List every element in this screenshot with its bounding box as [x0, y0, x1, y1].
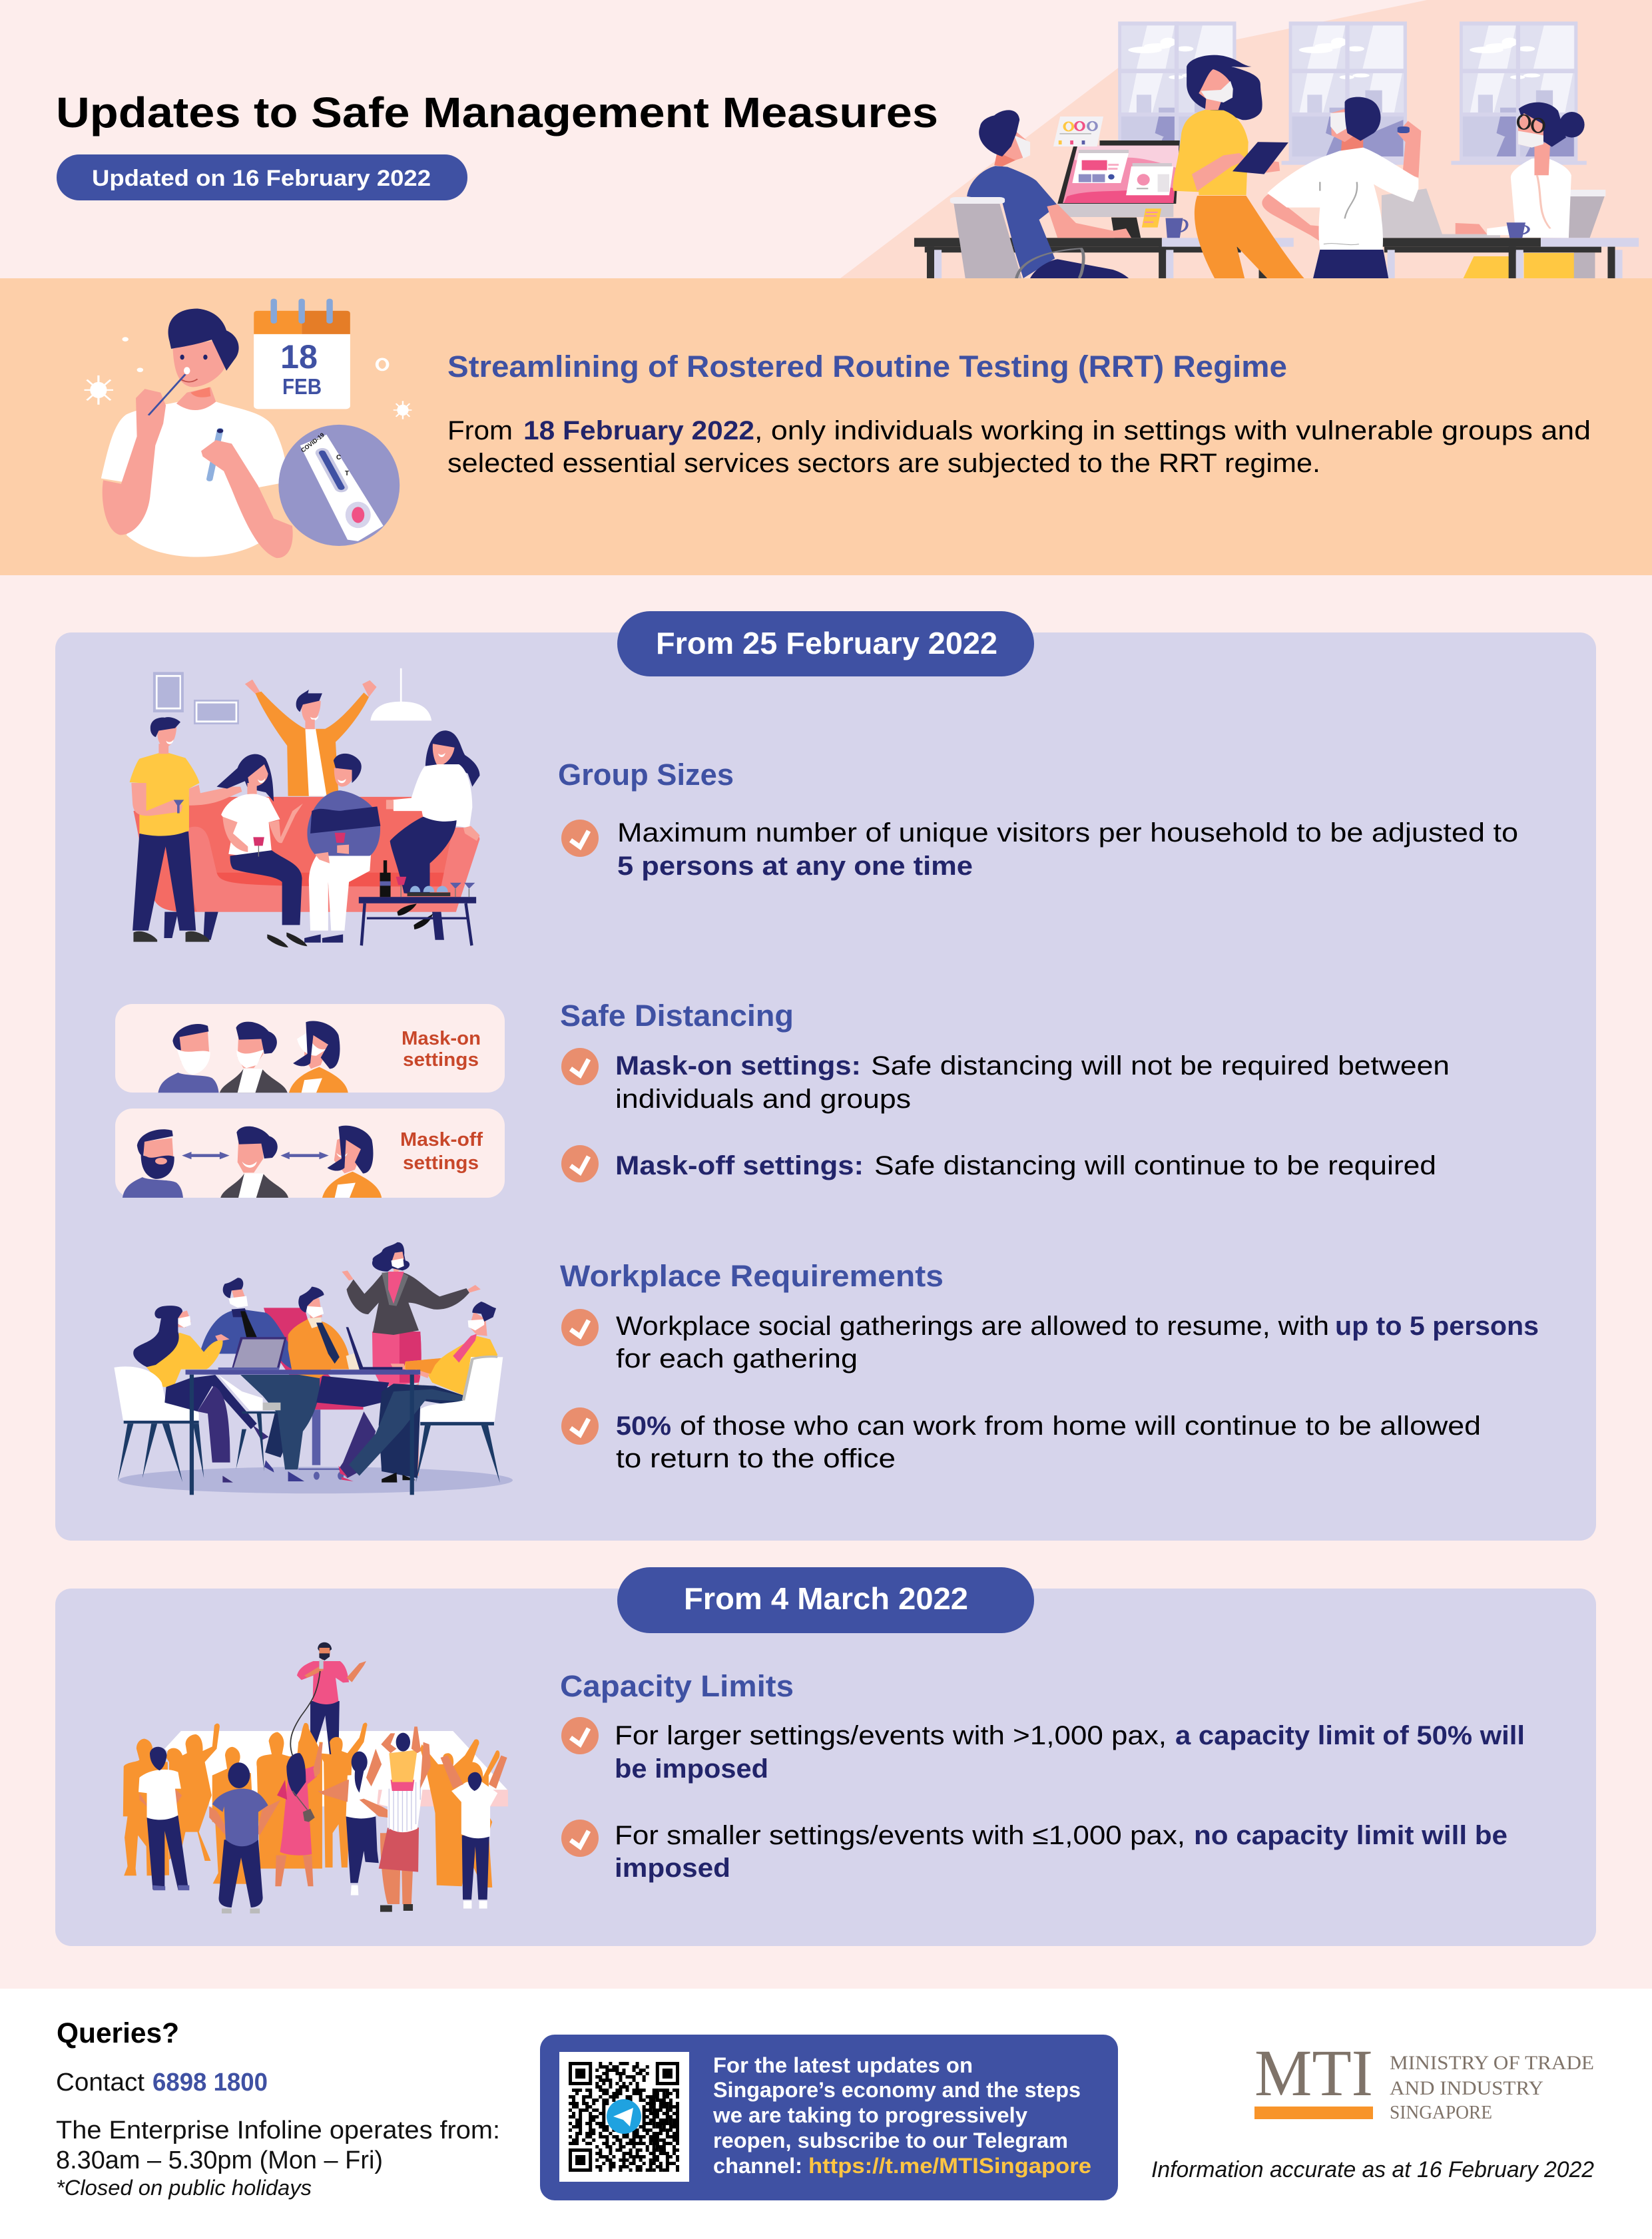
telegram call to action: we are taking to progressively: [712, 2103, 1027, 2127]
monitor: [1053, 117, 1187, 238]
text block: mask-off: Safe distancing will continue to be required: [874, 1151, 1436, 1180]
card: mask-off settings: [115, 1109, 505, 1198]
header section: [56, 0, 1652, 278]
man in white shirt: [1262, 97, 1500, 278]
standing woman: [342, 1242, 481, 1476]
woman in yellow with tablet: [1173, 55, 1304, 278]
text block: group sizes: 5 persons at any one time: [617, 852, 973, 881]
text block: mask-on: individuals and groups: [615, 1085, 911, 1114]
stage: [164, 1731, 508, 1806]
panel: telegram subscription: [540, 2035, 1118, 2200]
woman in yellow: [133, 1306, 223, 1387]
date pill: [617, 1567, 1034, 1633]
man in purple tee: [209, 1762, 280, 1913]
heading: workplace requirements: Workplace Requirements: [560, 1259, 944, 1293]
illustration: man swabbing nose, calendar and test kit: C: [336, 454, 341, 461]
man in orange: [288, 1287, 389, 1481]
icon: tick: [561, 1717, 599, 1754]
heading: capacity limits: Capacity Limits: [560, 1669, 794, 1703]
left chair: [114, 1367, 280, 1483]
text block: workplace gatherings: up to 5 persons: [1335, 1312, 1539, 1341]
logo: MTI: MINISTRY OF TRADE: [1390, 2052, 1594, 2074]
woman in pink dress: [275, 1742, 323, 1886]
heading: RRT: Streamlining of Rostered Routine Testing (RRT) Regime: [447, 350, 1287, 383]
back chair: [264, 1308, 364, 1480]
icon: telegram: [607, 2099, 641, 2134]
logo: MTI: MTI: [1254, 2036, 1373, 2110]
text block: group sizes: Maximum number of unique visitors per household to be adjusted to: [617, 818, 1518, 848]
text block: mask-on: [615, 1051, 1450, 1114]
text block: RRT details: selected essential services sectors are subjected to the RRT regime.: [447, 449, 1320, 478]
finder patterns: [569, 2062, 679, 2172]
text block: RRT details: 18 February 2022: [523, 416, 754, 445]
test kit labels: COVID-19: [300, 431, 326, 454]
text block: RRT details: , only individuals working in settings with vulnerable groups and: [754, 416, 1591, 445]
logo: MTI: [1254, 2036, 1594, 2123]
man: [101, 308, 293, 558]
text block: smaller events: For smaller settings/events with ≤1,000 pax,: [615, 1821, 1185, 1850]
text block: workplace gatherings: [616, 1312, 1539, 1373]
logo: MTI: AND INDUSTRY: [1390, 2077, 1543, 2099]
illustration: office workers with masks: [914, 21, 1639, 278]
man on right and chair: [349, 1302, 503, 1483]
text block: work from home: [616, 1411, 1481, 1473]
icon: tick: [561, 1820, 599, 1857]
text block: mask-on: Safe distancing will not be required between: [871, 1051, 1450, 1081]
telegram call to action: channel:: [713, 2154, 802, 2178]
telegram call to action: [712, 2053, 1091, 2178]
card: mask-on settings: Mask-on: [402, 1028, 481, 1049]
panel: from 4 March 2022: [55, 1567, 1596, 1946]
woman in white top: [216, 754, 308, 947]
table with laptops: [186, 1327, 420, 1495]
icon: tick: [561, 1145, 599, 1182]
footer: queries: Contact: [56, 2069, 144, 2097]
text block: mask-off: Mask-off settings:: [615, 1151, 864, 1180]
text block: work from home: to return to the office: [616, 1444, 896, 1473]
woman seated on sofa arm: [386, 730, 479, 929]
text block: group sizes: [617, 818, 1518, 881]
text block: smaller events: imposed: [615, 1854, 730, 1883]
QR code: [569, 2062, 679, 2172]
card: mask-on settings: settings: [403, 1049, 479, 1071]
man in yellow: [130, 717, 242, 942]
icon: tick: [561, 1309, 599, 1346]
text block: mask-on: Mask-on settings:: [615, 1051, 861, 1081]
card: mask-off settings: Mask-off: [400, 1129, 483, 1150]
footer: queries: Queries?: [57, 2017, 179, 2049]
text block: smaller events: [615, 1821, 1508, 1883]
illustration: crowd at a stage: [123, 1642, 508, 1913]
text block: larger events: be imposed: [615, 1754, 768, 1784]
footer: queries: [56, 2017, 500, 2200]
text block: RRT details: From: [447, 416, 513, 445]
heading: safe distancing: Safe Distancing: [560, 999, 794, 1033]
icon: tick: [561, 820, 599, 857]
calendar date: 18: [280, 338, 318, 375]
card: mask-off settings: settings: [403, 1152, 479, 1174]
wall decor: [153, 668, 431, 724]
text block: larger events: For larger settings/events with >1,000 pax,: [615, 1721, 1167, 1750]
text block: workplace gatherings: Workplace social gatherings are allowed to resume, with: [616, 1312, 1329, 1341]
calendar: [254, 301, 350, 409]
woman on the phone: [1456, 103, 1585, 238]
man in white with raised arms: [441, 1756, 507, 1909]
footer: queries: 6898 1800: [152, 2069, 268, 2097]
date pill: From 25 February 2022: [656, 626, 997, 660]
text block: workplace gatherings: for each gathering: [616, 1344, 858, 1373]
illustration: man swabbing nose, calendar and test kit: [85, 301, 412, 558]
illustration: office meeting: [114, 1242, 513, 1495]
illustration: home gathering on sofa: [130, 668, 479, 947]
text block: RRT details: [447, 416, 1591, 478]
woman with ponytail: [318, 1749, 382, 1895]
panel: from 25 February 2022: [55, 611, 1596, 1541]
footer: queries: The Enterprise Infoline operates from:: [56, 2116, 500, 2144]
seated man with striped sweater: [304, 754, 380, 943]
telegram call to action: reopen, subscribe to our Telegram: [713, 2128, 1068, 2152]
icon: tick: [561, 1048, 599, 1085]
heading: group sizes: Group Sizes: [558, 758, 734, 792]
icon: tick: [561, 1407, 599, 1445]
man with child on shoulders: [360, 1726, 431, 1912]
sofa: [133, 797, 479, 940]
footer: queries: *Closed on public holidays: [56, 2176, 312, 2200]
virus particles: [85, 337, 412, 419]
text block: work from home: 50%: [616, 1411, 671, 1441]
orange crowd silhouettes: [123, 1723, 499, 1887]
date pill: [617, 611, 1034, 676]
speaker: [290, 1642, 366, 1756]
illustration: man swabbing nose, calendar and test kit: FEB: [282, 374, 322, 399]
telegram call to action: Singapore’s economy and the steps: [713, 2078, 1081, 2102]
telegram call to action: https://t.me/MTISingapore: [808, 2154, 1091, 2178]
date pill: From 4 March 2022: [684, 1581, 968, 1616]
text block: larger events: [615, 1721, 1525, 1784]
man in blue: [200, 1278, 320, 1481]
desk back items: [1464, 190, 1605, 278]
footer: queries: 8.30am – 5.30pm (Mon – Fri): [56, 2146, 383, 2174]
date pill: Updated on 16 February 2022: [92, 166, 431, 191]
man in blue shirt: [950, 110, 1131, 278]
desks: [914, 238, 1639, 278]
date pill: [57, 154, 467, 200]
accuracy note: Information accurate as at 16 February 2022: [1151, 2157, 1594, 2182]
test kit circle: [278, 425, 400, 546]
standing man in orange: [245, 680, 377, 796]
text block: work from home: of those who can work from home will continue to be allowed: [680, 1411, 1481, 1441]
illustration: man swabbing nose, calendar and test kit: T: [345, 470, 349, 477]
telegram call to action: For the latest updates on: [713, 2053, 973, 2077]
coffee table: [359, 860, 476, 945]
logo: MTI: SINGAPORE: [1390, 2103, 1492, 2123]
text block: smaller events: no capacity limit will be: [1194, 1821, 1508, 1850]
man in white tee: [138, 1747, 189, 1890]
title: Updates to Safe Management Measures: [56, 89, 938, 136]
card: mask-on settings: [115, 1004, 505, 1093]
panel: RRT regime band: [0, 278, 1652, 575]
windows: [1118, 21, 1587, 165]
text block: larger events: a capacity limit of 50% will: [1175, 1721, 1525, 1750]
